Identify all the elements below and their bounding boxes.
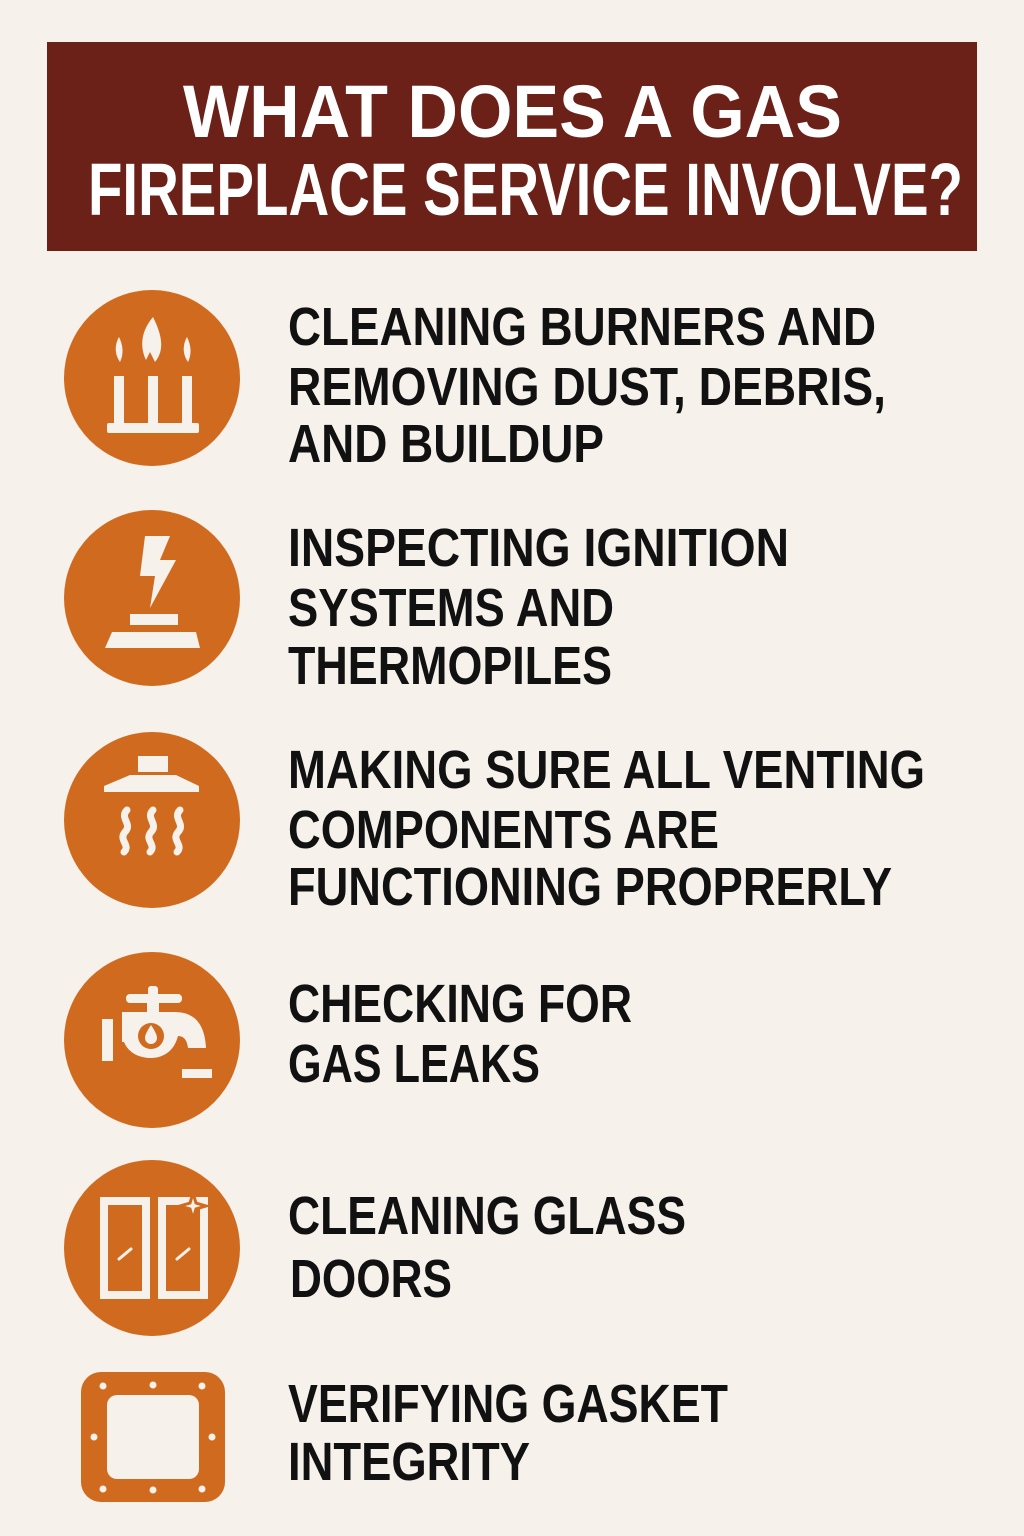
text: item 6: INTEGRITY <box>288 1432 530 1492</box>
icon: gas leak faucet <box>64 952 240 1128</box>
icon: ignition <box>64 510 240 686</box>
text: item 3: MAKING SURE ALL VENTING <box>288 740 925 800</box>
text: item 4: CHECKING FOR <box>288 974 632 1034</box>
icon: glass doors <box>64 1160 240 1336</box>
text: item 1 <box>288 297 886 474</box>
text: item 4: GAS LEAKS <box>288 1034 540 1094</box>
text: item 2: SYSTEMS AND <box>288 578 614 638</box>
text: item 1: REMOVING DUST, DEBRIS, <box>288 357 886 417</box>
text: item 3: FUNCTIONING PROPRERLY <box>288 857 892 917</box>
text: item 1: CLEANING BURNERS AND <box>288 297 876 357</box>
text: item 3: COMPONENTS ARE <box>288 800 719 860</box>
icon: burners <box>64 290 240 466</box>
text: item 5: DOORS <box>290 1249 452 1309</box>
text: item 3 <box>288 740 925 917</box>
text: item 2 <box>288 518 789 696</box>
title banner: WHAT DOES A GAS <box>183 70 842 153</box>
icon: venting <box>64 732 240 908</box>
text: item 1: AND BUILDUP <box>288 414 604 474</box>
text: item 2: THERMOPILES <box>288 636 612 696</box>
icon: gasket <box>81 1372 225 1502</box>
text: item 2: INSPECTING IGNITION <box>288 518 789 578</box>
text: item 4 <box>288 974 632 1094</box>
text: item 5 <box>288 1186 686 1309</box>
title banner <box>47 42 977 251</box>
text: item 6: VERIFYING GASKET <box>288 1374 728 1434</box>
text: item 6 <box>288 1374 728 1492</box>
text: item 5: CLEANING GLASS <box>288 1186 686 1246</box>
